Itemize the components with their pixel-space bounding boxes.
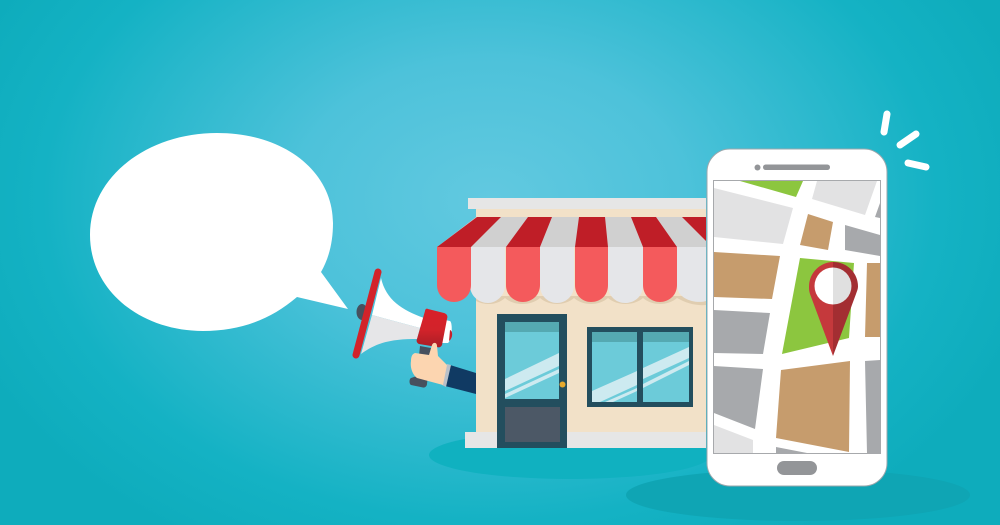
speech bubble [90,133,348,331]
store ground shadow [429,431,711,479]
store wall [476,209,706,433]
sleeve [445,365,476,394]
awning shadow [476,296,706,305]
phone ground shadow [626,469,970,521]
hand [411,343,447,385]
megaphone and hand [356,272,476,394]
megaphone rim [356,272,378,355]
speaker bar [763,164,830,170]
door [497,314,567,448]
cuff [442,364,451,387]
awning top grey [437,217,706,247]
location pin [809,262,858,356]
brown blocks [714,214,880,452]
store [437,198,706,448]
parks [740,181,854,354]
megaphone rear [442,320,452,343]
base step [465,432,706,448]
megaphone back cap [356,304,368,320]
door knob [560,382,566,388]
megaphone horn lower [361,315,420,354]
pin hole [815,268,833,304]
smartphone [707,149,887,486]
speaker dot [754,164,760,170]
grey blocks [714,203,880,453]
map screen [714,180,880,454]
megaphone handle [410,346,431,388]
roof ledge [468,198,706,209]
megaphone horn upper [372,278,424,328]
window [587,327,693,407]
phone body [707,149,887,486]
light grey blocks [714,181,877,453]
notification rays [884,114,926,167]
awning red scallops [437,247,677,302]
awning white scallops [470,247,706,303]
megaphone rear tip [449,330,452,341]
home button [777,461,817,475]
megaphone collar [417,309,447,347]
awning top red stripes [437,217,706,247]
awning [437,217,706,303]
